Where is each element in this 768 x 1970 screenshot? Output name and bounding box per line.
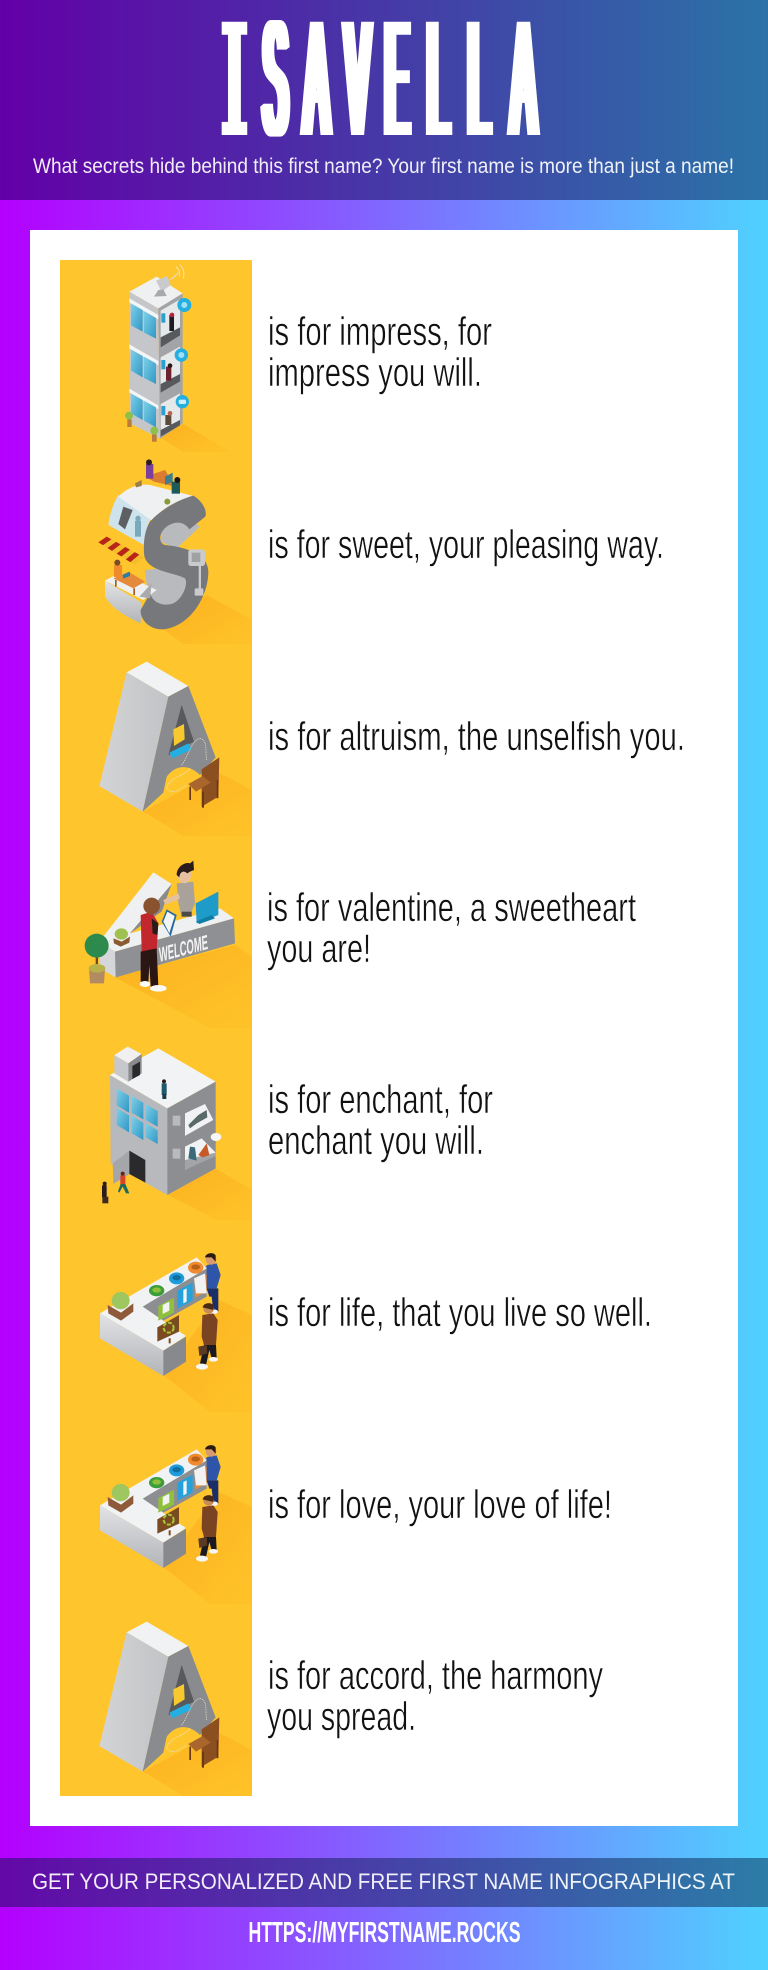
text: last A line: is for accord, the harmony — [268, 1654, 603, 1698]
icon: letter A office — [99, 662, 252, 836]
icon: second letter A office — [99, 1622, 252, 1796]
text: I line: impress you will. — [268, 351, 482, 395]
text: last A line — [267, 1654, 603, 1739]
text: V line: is for valentine, a sweetheart — [267, 886, 636, 930]
icon: second letter L recycling station — [100, 1445, 252, 1604]
footer url: HTTPS://MYFIRSTNAME.ROCKS — [248, 1917, 520, 1949]
icon: letter S office — [98, 459, 252, 644]
icon: letter L recycling station — [100, 1253, 252, 1412]
text: last A line: you spread. — [267, 1695, 416, 1739]
footer call-to-action band — [0, 1858, 768, 1907]
icon: letter V welcome desk: WELCOME — [158, 932, 209, 967]
text: E line: enchant you will. — [268, 1119, 484, 1163]
panel: white card — [30, 230, 738, 1826]
text: second L line: is for love, your love of life! — [268, 1483, 612, 1527]
text: I line: is for impress, for — [268, 310, 492, 354]
icon: letter I office tower — [125, 264, 208, 450]
text: V line: you are! — [267, 927, 371, 971]
header band — [0, 0, 768, 200]
text: E line: is for enchant, for — [268, 1078, 493, 1122]
icon: letter V welcome desk — [85, 861, 252, 1028]
text: I line — [268, 310, 492, 395]
panel: letter rows — [60, 260, 682, 1796]
text: E line — [268, 1078, 493, 1163]
icon: letter E building — [102, 1047, 252, 1220]
yellow illustration column — [60, 260, 252, 1796]
text: V line — [267, 886, 636, 971]
